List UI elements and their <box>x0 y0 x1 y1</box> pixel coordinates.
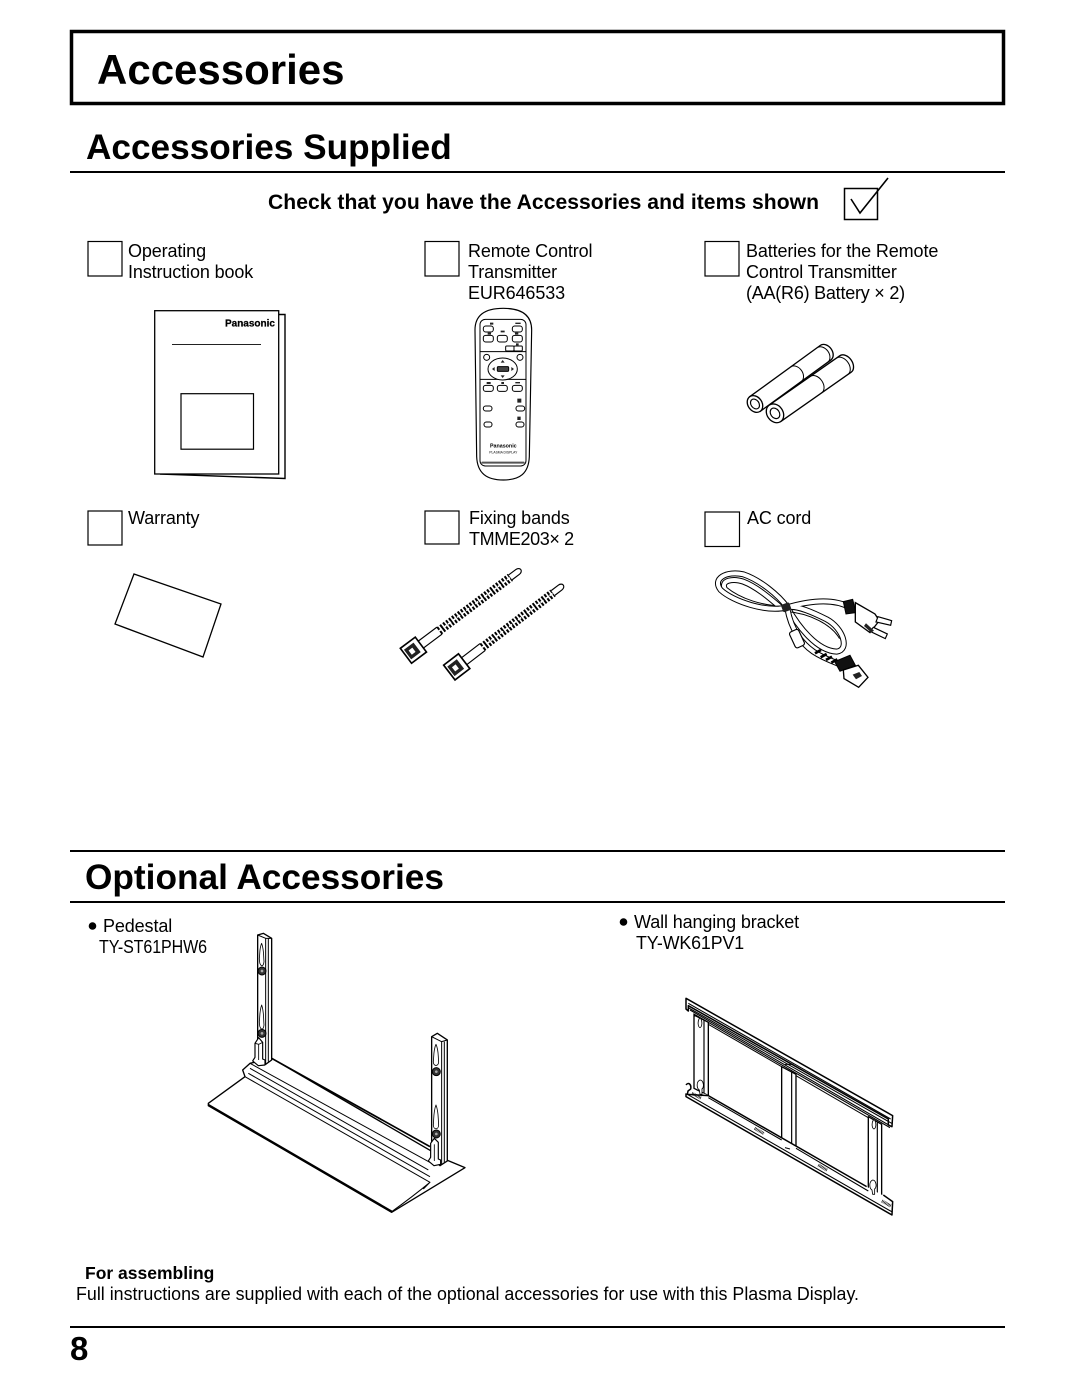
item: wall hanging bracket: Wall hanging bracket <box>634 912 799 932</box>
icon: warranty card <box>115 574 221 657</box>
item: batteries <box>705 241 938 426</box>
item: batteries: Batteries for the Remote <box>746 241 938 261</box>
item: pedestal <box>89 916 465 1212</box>
item: warranty: Warranty <box>128 508 200 528</box>
text block: for assembling: Full instructions are supplied with each of the optional accessories for use with this Plasma Display. <box>76 1284 859 1304</box>
text block: for assembling <box>76 1263 859 1304</box>
item: fixing bands <box>400 508 574 680</box>
illustration: wall bracket <box>686 998 893 1215</box>
item: fixing bands: TMME203× 2 <box>469 529 574 549</box>
item: operating instruction book: Instruction book <box>128 262 254 282</box>
item: fixing bands: Fixing bands <box>469 508 570 528</box>
item: pedestal: TY-ST61PHW6 <box>99 937 207 957</box>
title box <box>72 32 1004 104</box>
icon: instruction book <box>155 311 285 478</box>
item: remote control <box>425 241 592 480</box>
heading: Optional Accessories: Optional Accessories <box>85 858 444 897</box>
icon: remote control: PLASMA DISPLAY <box>489 450 518 454</box>
item: AC cord: AC cord <box>747 508 811 528</box>
icon: batteries <box>744 341 857 426</box>
item: wall hanging bracket <box>620 912 893 1215</box>
item: pedestal: Pedestal <box>103 916 172 936</box>
icon: instruction book: Panasonic <box>225 318 275 330</box>
item: remote control: Remote Control <box>468 241 592 261</box>
title box: Accessories <box>97 46 345 93</box>
item: operating instruction book <box>88 241 285 478</box>
instruction line with check box <box>268 178 888 220</box>
instruction line with check box: Check that you have the Accessories and items shown <box>268 191 819 214</box>
item: remote control: EUR646533 <box>468 283 565 303</box>
item: AC cord <box>705 508 892 687</box>
heading: Accessories Supplied: Accessories Supplied <box>86 128 452 167</box>
icon: AC cord <box>718 573 892 687</box>
illustration: pedestal <box>208 933 465 1212</box>
page number: 8 <box>70 1330 88 1367</box>
icon: remote control: Panasonic <box>490 443 517 449</box>
item: warranty <box>88 508 221 657</box>
icon: fixing bands <box>400 562 569 680</box>
item: operating instruction book: Operating <box>128 241 206 261</box>
text block: for assembling: For assembling <box>85 1263 214 1283</box>
item: batteries: (AA(R6) Battery × 2) <box>746 283 905 303</box>
item: batteries: Control Transmitter <box>746 262 897 282</box>
icon: remote control <box>475 308 532 480</box>
item: wall hanging bracket: TY-WK61PV1 <box>636 933 744 953</box>
item: remote control: Transmitter <box>468 262 557 282</box>
